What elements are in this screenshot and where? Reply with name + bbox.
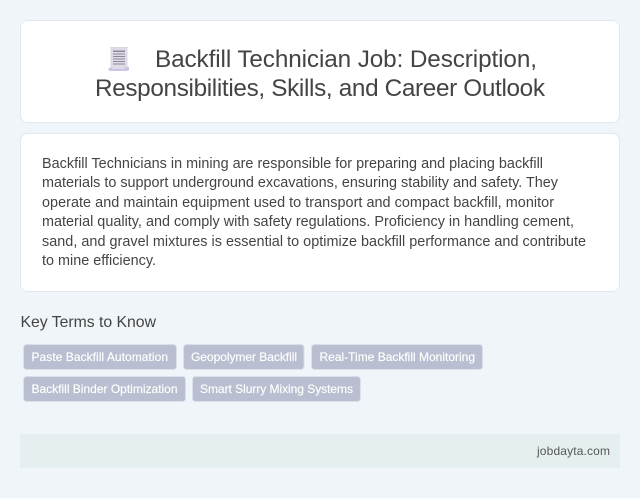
tag: Backfill Binder Optimization [24, 376, 186, 402]
tag: Smart Slurry Mixing Systems [192, 376, 360, 402]
tag: Smart Slurry Mixing Systems: Smart Slurry Mixing Systems [200, 382, 353, 396]
description paragraph: operate and maintain equipment used to transport and compact backfill, monitor [42, 195, 554, 211]
description paragraph [42, 156, 586, 269]
title text: Responsibilities, Skills, and Career Outlook [95, 75, 546, 102]
tag: Real-Time Backfill Monitoring [312, 344, 482, 370]
icon: document scroll [108, 48, 129, 71]
description paragraph: materials to support underground excavations, ensuring stability and safety. They [42, 175, 559, 191]
tag: Backfill Binder Optimization: Backfill Binder Optimization [32, 382, 178, 396]
description paragraph: Backfill Technicians in mining are responsible for preparing and placing backfill [42, 156, 543, 172]
tag: Geopolymer Backfill: Geopolymer Backfill [191, 350, 297, 364]
heading: key terms: Key Terms to Know [20, 314, 157, 331]
footer bar: jobdayta.com [536, 444, 610, 458]
title text [95, 46, 546, 102]
footer bar [20, 434, 620, 468]
title text: Backfill Technician Job: Description, [155, 46, 537, 73]
tag: Geopolymer Backfill [184, 344, 304, 370]
description paragraph: to mine efficiency. [42, 253, 156, 269]
tag: Paste Backfill Automation [24, 344, 176, 370]
tag: Paste Backfill Automation: Paste Backfill Automation [32, 350, 168, 364]
description paragraph: material quality, and comply with safety regulations. Proficiency in handling cement, [42, 214, 574, 230]
tag: Real-Time Backfill Monitoring: Real-Time Backfill Monitoring [320, 350, 475, 364]
description paragraph: sand, and gravel mixtures is essential to optimize backfill performance and contribute [42, 234, 586, 250]
panel: title card [20, 20, 620, 122]
panel: description card [20, 134, 620, 292]
